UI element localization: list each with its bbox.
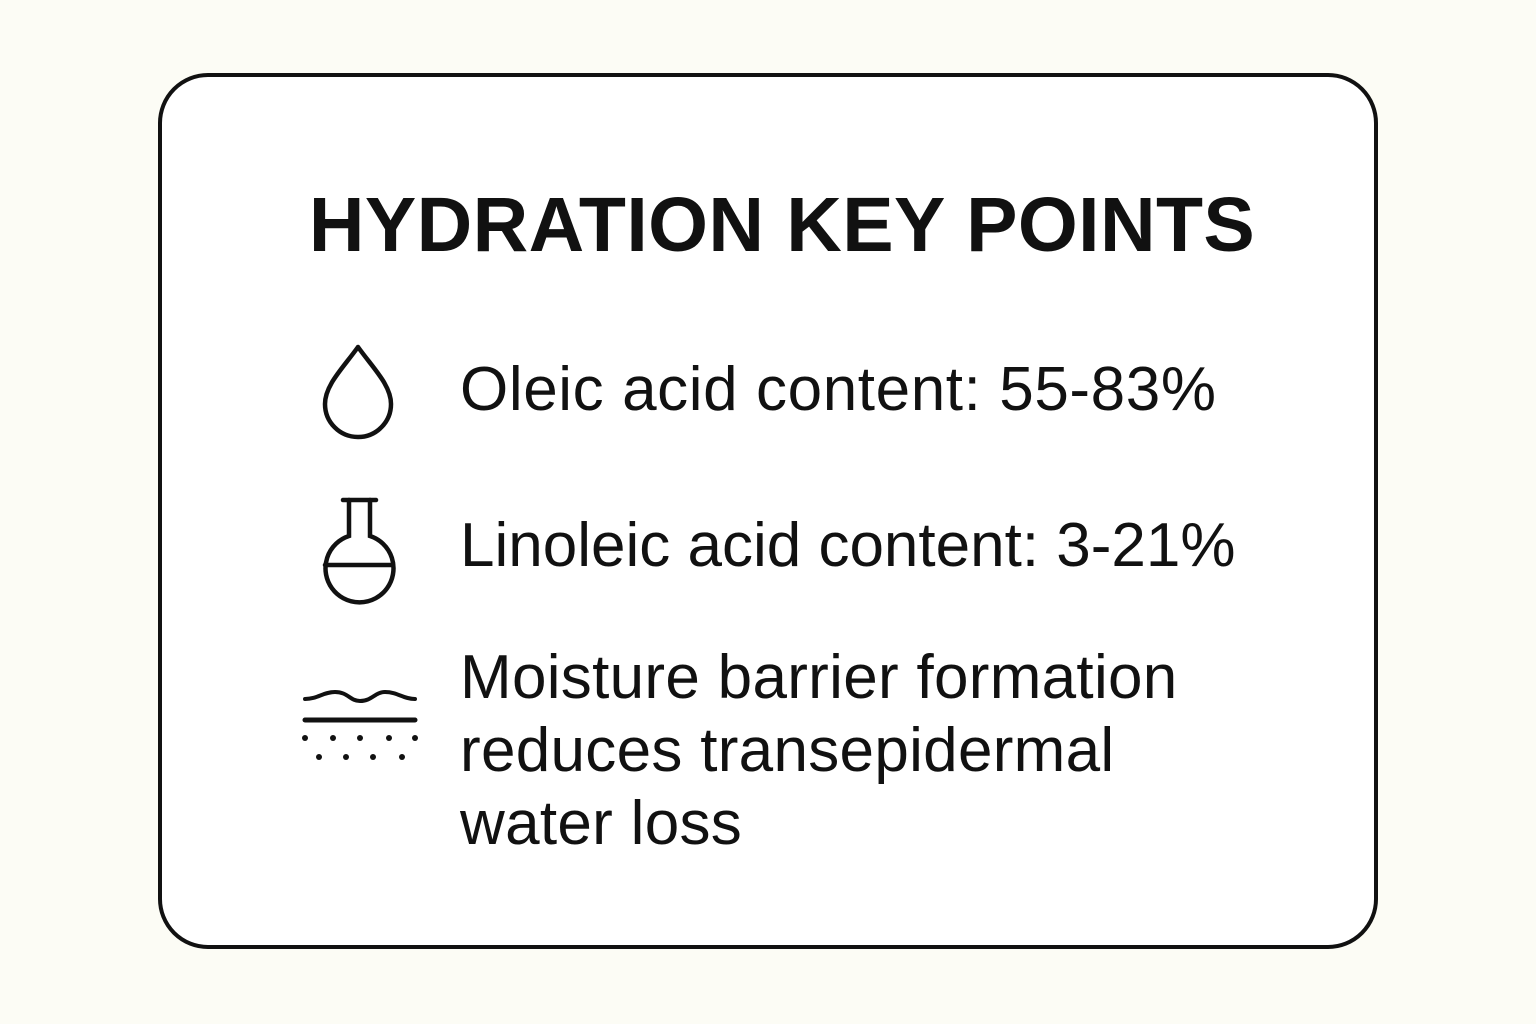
text: linoleic acid: Linoleic acid content: 3-21%	[460, 511, 1235, 580]
panel: hydration card	[158, 73, 1378, 949]
text: moisture barrier: water loss	[460, 789, 742, 858]
text: moisture barrier: reduces transepidermal	[460, 716, 1114, 785]
text: oleic acid: Oleic acid content: 55-83%	[460, 355, 1217, 424]
title: HYDRATION KEY POINTS	[309, 182, 1255, 268]
text: moisture barrier	[460, 643, 1178, 858]
text: moisture barrier: Moisture barrier formation	[460, 643, 1178, 712]
